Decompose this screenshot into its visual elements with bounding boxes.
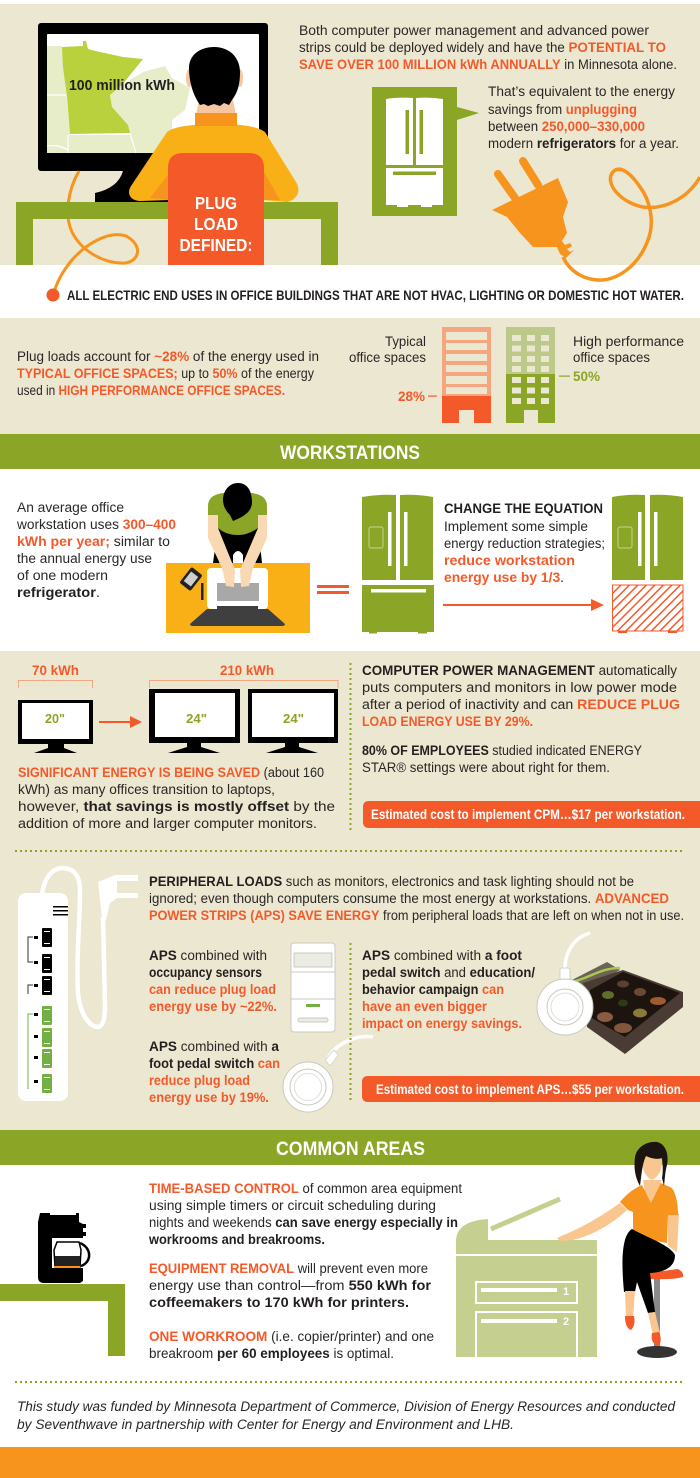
map of Minnesota	[47, 41, 190, 153]
icon: plug and cord	[492, 161, 700, 280]
common areas text: energy use than control—from 550 kWh for	[149, 1278, 432, 1293]
plug loads share text: TYPICAL OFFICE SPACES; up to 50% of the energy	[17, 366, 314, 381]
occupancy sensors text: APS combined with	[149, 948, 267, 963]
illustration: woman on stool	[557, 1142, 683, 1358]
occupancy sensors text	[149, 948, 277, 1014]
workstation text: the annual energy use	[17, 551, 152, 566]
foot pedal text: APS combined with a	[149, 1039, 279, 1054]
icon: refrigerator callout	[372, 87, 479, 216]
chart labels: 50%	[573, 369, 600, 384]
chair heading: plug load defined	[180, 193, 252, 255]
icon: power strip	[18, 868, 138, 1101]
intro text: SAVE OVER 100 MILLION kWh ANNUALLY in Minnesota alone.	[299, 57, 677, 72]
tablet and pen	[179, 567, 203, 591]
white definition band	[0, 265, 700, 318]
icon: foot pedal	[283, 1037, 373, 1112]
computer power management text: after a period of inactivity and can REDUCE PLUG	[362, 697, 680, 712]
equivalence text: That’s equivalent to the energy	[488, 84, 675, 99]
education campaign text: pedal switch and education/	[362, 965, 535, 980]
education campaign text: APS combined with a foot	[362, 948, 523, 963]
plug loads share text: Plug loads account for ~28% of the energy used in	[17, 349, 319, 364]
chart: monitors and kWh: 70 kWh	[32, 662, 79, 678]
equals sign	[317, 585, 349, 594]
energy saved text: however, that savings is mostly offset by the	[18, 799, 335, 814]
equivalence text: modern refrigerators for a year.	[488, 136, 679, 151]
shirt	[208, 493, 267, 535]
head	[223, 483, 252, 521]
peripheral loads text	[149, 874, 684, 923]
change the equation text: reduce workstation	[444, 553, 575, 568]
workstation text: of one modern	[17, 568, 108, 583]
chart labels: 28%	[398, 389, 425, 404]
workstation text: An average office	[17, 500, 124, 515]
illustration: copier	[456, 1199, 597, 1357]
icon: occupancy sensor	[291, 943, 335, 1032]
common areas text: EQUIPMENT REMOVAL will prevent even more	[149, 1261, 428, 1276]
computer power management text	[362, 663, 680, 775]
arrow	[443, 599, 604, 611]
workstation text: refrigerator .	[17, 585, 100, 600]
chart labels: office spaces	[573, 350, 650, 365]
monitor 24 inch left: 24"	[186, 711, 207, 726]
section header: common areas	[0, 1130, 700, 1165]
icon: coffee maker on table	[0, 1213, 125, 1356]
illustration: workstation top view	[166, 483, 310, 633]
section header: workstations: WORKSTATIONS	[280, 443, 420, 464]
occupancy sensors text: energy use by ~22%.	[149, 999, 277, 1014]
intro text: Both computer power management and advanced power	[299, 23, 650, 38]
computer power management text: puts computers and monitors in low power mode	[362, 680, 677, 695]
photo: box of chocolates with pedal	[537, 933, 683, 1054]
funding note: by Seventhwave in partnership with Center for Energy and Environment and LHB.	[17, 1417, 514, 1432]
common areas text: using simple timers or circuit scheduling during	[149, 1198, 436, 1213]
workstation text: kWh per year; similar to	[17, 534, 170, 549]
education campaign text: have an even bigger	[362, 999, 488, 1014]
energy saved text: addition of more and larger computer monitors.	[18, 816, 317, 831]
monitor 20 inch	[18, 700, 93, 753]
equivalence text: savings from unplugging	[488, 102, 637, 117]
common areas text: nights and weekends can save energy especially in	[149, 1215, 458, 1230]
plug loads share text: used in HIGH PERFORMANCE OFFICE SPACES.	[17, 383, 285, 398]
computer power management text: COMPUTER POWER MANAGEMENT automatically	[362, 663, 677, 678]
computer power management text: STAR® settings were about right for them.	[362, 760, 610, 775]
chart labels	[349, 334, 684, 404]
arms and hands	[208, 514, 267, 587]
chart labels: office spaces	[349, 350, 426, 365]
chart: monitors and kWh: 210 kWh	[220, 662, 274, 678]
energy saved text: kWh) as many offices transition to laptops,	[18, 782, 275, 797]
workstation text	[16, 500, 176, 600]
section header: workstations	[0, 434, 700, 469]
background bands	[0, 4, 700, 1130]
occupancy sensors text: occupancy sensors	[149, 965, 262, 980]
peripheral loads text: ignored; even though computers consume the most energy at workstations. ADVANCED	[149, 891, 669, 906]
monitor 24 inch right: 24"	[283, 711, 304, 726]
equivalence text: between 250,000–330,000	[488, 119, 645, 134]
energy saved text	[18, 765, 335, 831]
intro text	[299, 23, 677, 72]
energy saved text: SIGNIFICANT ENERGY IS BEING SAVED (about 160	[18, 765, 324, 780]
chart: monitors and kWh	[18, 662, 338, 753]
change the equation text: energy use by 1/3.	[444, 570, 564, 585]
illustration: copier: 1	[563, 1286, 569, 1298]
monitor 24 inch right	[248, 689, 338, 753]
education campaign text: behavior campaign can	[362, 982, 504, 997]
chart labels: High performance	[573, 334, 684, 349]
illustration: person at computer	[16, 23, 338, 295]
icon: reduced refrigerator	[612, 495, 683, 633]
computer power management text: LOAD ENERGY USE BY 29%.	[362, 714, 533, 729]
occupancy sensors text: can reduce plug load	[149, 982, 276, 997]
intro text: strips could be deployed widely and have the POTENTIAL TO	[299, 40, 666, 55]
common areas text: workrooms and breakrooms.	[148, 1232, 325, 1247]
chair heading: plug load defined: LOAD	[194, 214, 238, 234]
icon: full refrigerator	[362, 495, 434, 634]
cord tail over band	[53, 260, 72, 295]
education campaign text	[362, 948, 535, 1031]
peripheral loads text: POWER STRIPS (APS) SAVE ENERGY from peripheral loads that are left on when not in use.	[149, 908, 684, 923]
chart labels: Typical	[385, 334, 426, 349]
workstation text: workstation uses 300–400	[16, 517, 176, 532]
chair heading: plug load defined: DEFINED:	[180, 235, 252, 255]
chart: typical office building	[442, 327, 491, 423]
map label: 100 million kWh	[69, 78, 175, 94]
common areas text: breakroom per 60 employees is optimal.	[149, 1346, 394, 1361]
common areas text: ONE WORKROOM (i.e. copier/printer) and one	[149, 1329, 434, 1344]
cost callout: APS	[362, 1076, 700, 1102]
laptop	[190, 568, 285, 626]
common areas text	[148, 1181, 462, 1361]
common areas text: coffeemakers to 170 kWh for printers.	[149, 1295, 409, 1310]
peripheral loads text: PERIPHERAL LOADS such as monitors, electronics and task lighting should not be	[149, 874, 634, 889]
funding note: This study was funded by Minnesota Department of Commerce, Division of Energy Resources and conducted	[17, 1399, 675, 1414]
plug loads share text	[17, 349, 319, 398]
footer band	[0, 1447, 700, 1478]
computer power management text: 80% OF EMPLOYEES studied indicated ENERGY	[362, 743, 642, 758]
monitor 20 inch: 20"	[45, 711, 65, 726]
monitor 24 inch left	[149, 689, 240, 753]
monitor	[38, 23, 268, 202]
legs	[213, 526, 262, 563]
change the equation text	[444, 500, 605, 585]
desk	[16, 202, 338, 265]
cost callout: CPM	[363, 801, 700, 828]
person	[129, 47, 298, 202]
foot pedal text	[149, 1039, 280, 1105]
foot pedal text: energy use by 19%.	[149, 1090, 269, 1105]
section header: common areas: COMMON AREAS	[276, 1139, 425, 1160]
foot pedal text: foot pedal switch can	[149, 1056, 280, 1071]
arrow between monitors	[99, 716, 142, 728]
chair heading: plug load defined: PLUG	[195, 193, 237, 213]
cord from monitor	[53, 171, 138, 295]
chair	[168, 153, 264, 265]
change the equation text: Implement some simple	[444, 519, 588, 534]
desk surface	[166, 563, 310, 633]
common areas text: TIME-BASED CONTROL of common area equipment	[149, 1181, 462, 1196]
change the equation text: energy reduction strategies;	[444, 536, 605, 551]
foot pedal text: reduce plug load	[149, 1073, 250, 1088]
illustration: copier: 2	[563, 1316, 569, 1328]
funding note	[17, 1399, 675, 1432]
definition dot	[46, 288, 60, 302]
chart: high performance building	[506, 327, 555, 423]
equivalence text	[488, 84, 679, 151]
change the equation text: CHANGE THE EQUATION	[444, 500, 603, 516]
education campaign text: impact on energy savings.	[362, 1016, 522, 1031]
